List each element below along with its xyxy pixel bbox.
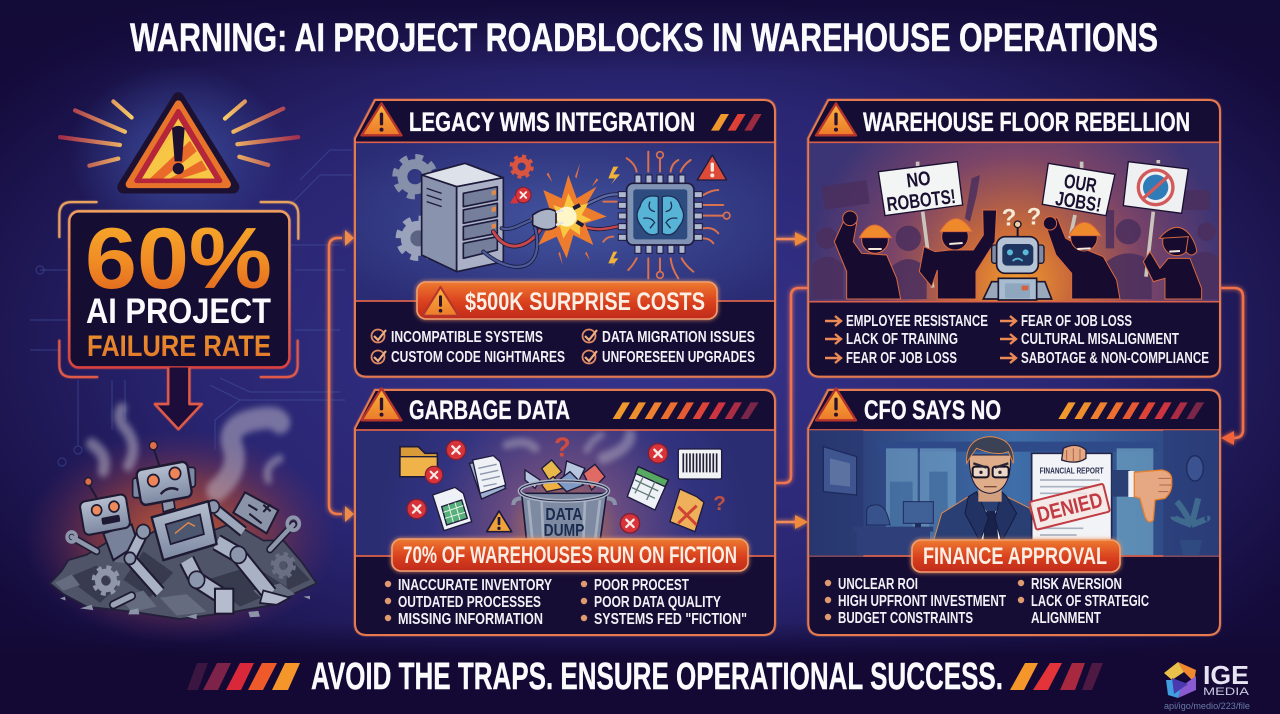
list: data issues: POOR DATA QUALITY (594, 594, 721, 611)
callout: fiction stat (392, 539, 748, 571)
decorative hazard stripes (613, 402, 759, 419)
list: resistance points: CULTURAL MISALIGNMENT (1021, 331, 1179, 348)
heading: LEGACY WMS INTEGRATION (409, 107, 695, 137)
icon: data dump bin (513, 460, 615, 542)
list: integration issues: UNFORESEEN UPGRADES (602, 349, 755, 366)
panel: CFO says no (808, 388, 1220, 635)
left hazard stripes (187, 663, 300, 690)
icon: green table (627, 467, 668, 510)
icon: header warning (362, 103, 401, 135)
robot with question marks: ? (1027, 203, 1041, 230)
panel: stat box (59, 202, 298, 377)
icon: alert triangle (697, 155, 727, 180)
icon: header warning (816, 103, 856, 135)
list: finance issues: RISK AVERSION (1031, 576, 1122, 593)
arrow: garbage data to CFO (776, 515, 808, 529)
list: integration issues: CUSTOM CODE NIGHTMARES (391, 349, 565, 366)
logo: IGE media (1164, 660, 1250, 711)
panel: garbage data (355, 388, 775, 635)
illustration: pile of broken robots (23, 408, 337, 644)
callout: finance approval: FINANCE APPROVAL (923, 543, 1107, 570)
broken robot right (217, 492, 278, 533)
list: integration issues (372, 329, 755, 366)
list: finance issues (825, 576, 1149, 627)
right hazard stripes (1010, 663, 1103, 690)
list: data issues: OUTDATED PROCESSES (398, 594, 541, 611)
small robot left (79, 478, 138, 560)
footer banner (187, 656, 1103, 698)
scrap: gears and wrenches (67, 517, 299, 605)
callout: surprise costs: $500K SURPRISE COSTS (465, 288, 705, 316)
smoke (507, 435, 630, 458)
panel: legacy WMS integration (355, 100, 775, 377)
list: data issues: SYSTEMS FED "FICTION" (594, 611, 747, 628)
icon: header warning (816, 388, 856, 420)
CFO figure (933, 437, 1038, 542)
question marks: ? (554, 432, 571, 463)
icon: spreadsheet (433, 487, 472, 531)
decorative hazard stripes (1058, 402, 1204, 419)
sign: our jobs: OUR (1062, 171, 1098, 198)
list: resistance points: LACK OF TRAINING (846, 331, 958, 348)
list: data issues: MISSING INFORMATION (398, 611, 543, 628)
list: finance issues: UNCLEAR ROI (838, 576, 918, 593)
worker 2 with sign (918, 162, 997, 299)
illustration: data dump bin and broken files (400, 432, 726, 542)
robot with question marks (983, 203, 1052, 300)
list: data issues: INACCURATE INVENTORY (398, 577, 552, 594)
callout: fiction stat: 70% OF WAREHOUSES RUN ON FICTION (403, 542, 737, 569)
sign: our jobs (1042, 163, 1115, 217)
list: data issues (385, 577, 747, 628)
list: integration issues: INCOMPATIBLE SYSTEMS (391, 329, 543, 346)
question marks (555, 437, 725, 510)
icon: barcode (678, 449, 722, 479)
sign: no robots: NO (905, 168, 932, 192)
big number: 60% (85, 211, 272, 307)
explosion (530, 163, 620, 268)
list: finance issues: BUDGET CONSTRAINTS (838, 610, 973, 627)
arrow: garbage data up to floor rebellion (776, 288, 808, 483)
icon: broken folder (400, 447, 443, 484)
question marks: ? (713, 492, 726, 515)
icon: warning triangle with rays (60, 99, 298, 187)
list: resistance points: EMPLOYEE RESISTANCE (846, 313, 988, 330)
list: resistance points (825, 313, 1209, 367)
icon: warning small (487, 511, 512, 532)
worker 3 with sign (1043, 162, 1120, 299)
icon: crossed document (670, 489, 704, 532)
arrow: legacy WMS to floor rebellion (776, 232, 808, 246)
robot with question marks: ? (1002, 205, 1016, 232)
icon: server tower (422, 163, 503, 272)
list: finance issues: HIGH UPFRONT INVESTMENT (838, 593, 1006, 610)
worker 1 (834, 211, 901, 299)
icon: stacked document (469, 456, 506, 499)
list: finance issues: LACK OF STRATEGIC (1031, 593, 1149, 610)
callout: finance approval (912, 540, 1120, 572)
list: data issues: POOR PROCEST (594, 577, 689, 594)
panel: warehouse floor rebellion (808, 100, 1220, 377)
sign: no robots (878, 162, 963, 216)
wires and plug (483, 194, 625, 267)
list: integration issues: DATA MIGRATION ISSUES (602, 329, 755, 346)
report with fist: DENIED (1035, 488, 1105, 527)
stat sublabel: FAILURE RATE (87, 330, 271, 363)
icon: header warning (362, 388, 401, 420)
sign: no robots: ROBOTS! (886, 186, 957, 216)
worker 4 with sign (1143, 160, 1202, 299)
icon: gears (395, 157, 438, 258)
illustration: protesting workers and robot (812, 160, 1218, 300)
icon: data dump bin: DATA (545, 504, 583, 524)
callout: surprise costs (417, 282, 717, 319)
report with fist: FINANCIAL REPORT (1040, 465, 1104, 475)
decorative hazard stripes (711, 114, 762, 131)
sign: no AI (1123, 162, 1188, 213)
arrow: down to scrap pile (155, 368, 202, 429)
logo: IGE media: MEDIA (1203, 686, 1250, 698)
stat label: AI PROJECT (86, 292, 271, 331)
list: resistance points: FEAR OF JOB LOSS (1021, 313, 1132, 330)
thumbs down hand (1112, 470, 1172, 522)
arrow: split connector from stat box to left panels (329, 230, 354, 522)
icon: logo play mark (1164, 662, 1196, 698)
heading: CFO SAYS NO (864, 395, 1001, 425)
icon: AI chip with brain (603, 152, 730, 278)
logo: IGE media: api/igo/medio/223/file (1164, 701, 1250, 711)
main robot (124, 441, 290, 614)
logo: IGE media: IGE (1203, 660, 1249, 690)
heading: GARBAGE DATA (409, 395, 570, 425)
illustration: server plug sparks into AI chip (395, 152, 730, 278)
background crowd (812, 175, 1218, 299)
list: finance issues: ALIGNMENT (1031, 610, 1101, 627)
arrow: floor rebellion down to CFO (1220, 288, 1243, 445)
icon: data dump bin: DUMP (544, 520, 584, 540)
office background (809, 430, 1219, 557)
panel: 60% failure rate column (23, 65, 337, 644)
list: resistance points: SABOTAGE & NON-COMPLIANCE (1021, 350, 1209, 367)
report with fist (1029, 445, 1112, 543)
illustration: CFO denying financial report (809, 430, 1219, 557)
sign: our jobs: JOBS! (1054, 188, 1103, 217)
list: resistance points: FEAR OF JOB LOSS (846, 350, 957, 367)
